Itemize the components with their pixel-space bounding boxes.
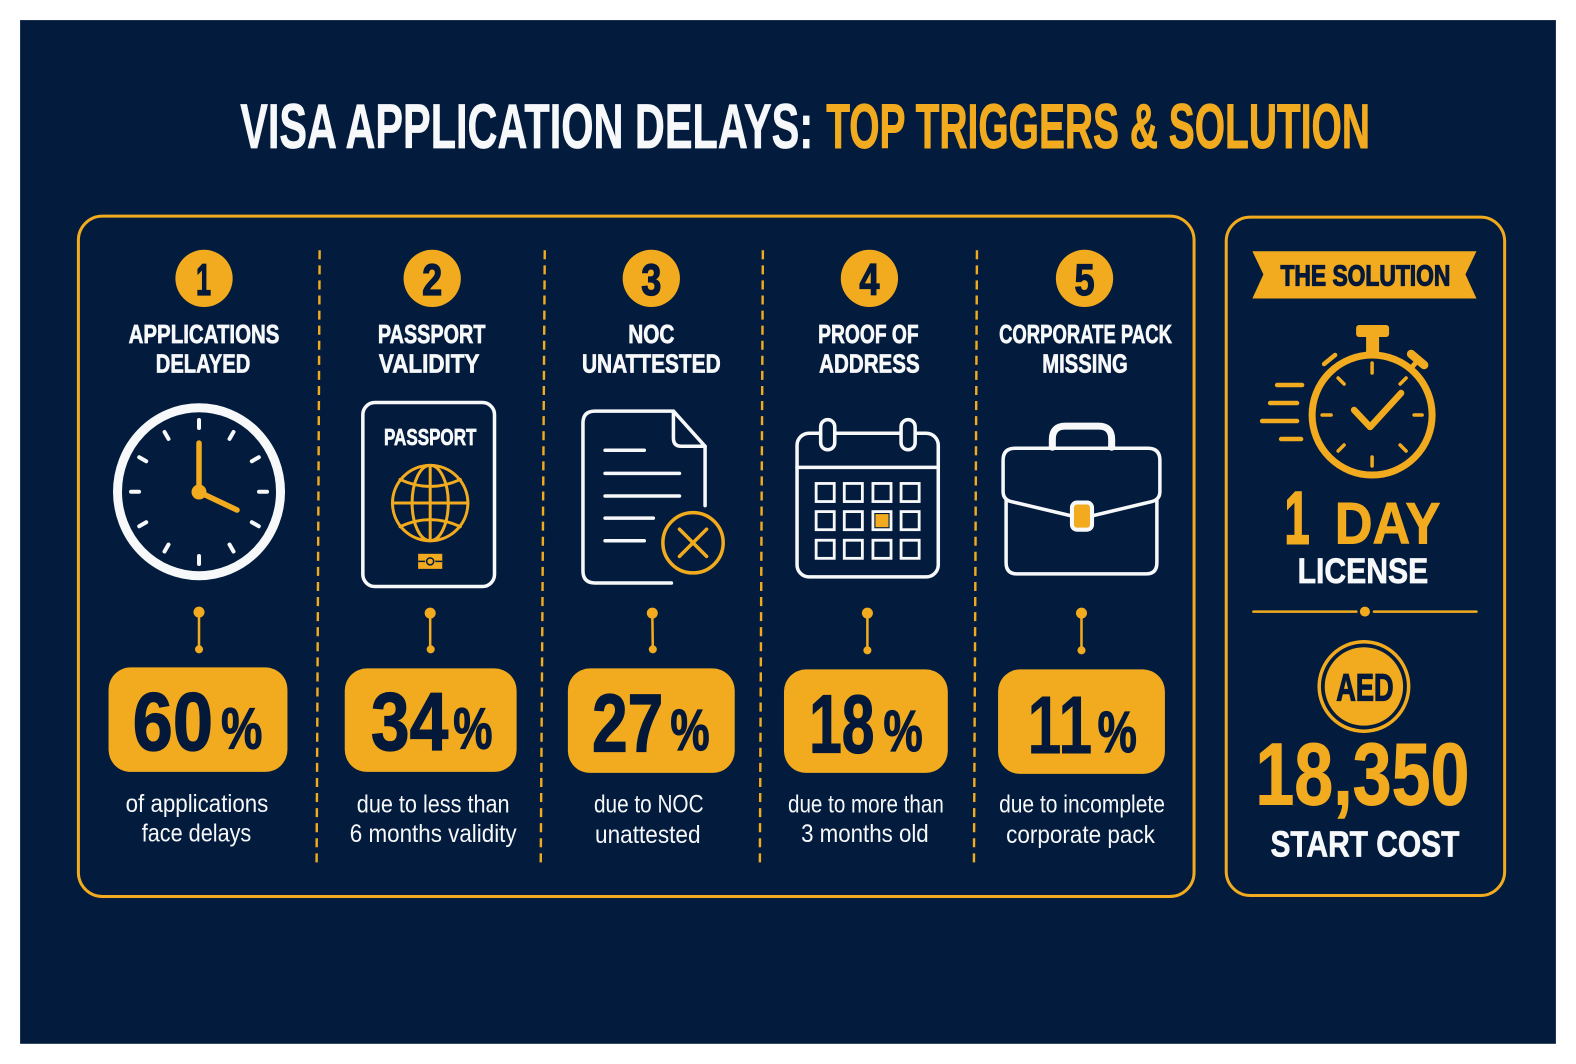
number badge 4 [841,250,898,307]
stat: 11% [998,669,1165,774]
label: license: LICENSE [1298,552,1428,591]
icon: calendar [797,420,938,577]
caption 1: face delays [142,819,251,847]
heading: corporate pack missing [999,319,1172,378]
stat: 11%: 11 [1027,679,1093,771]
stat: 18%: % [883,699,923,764]
number badge 5 [1056,250,1113,307]
stat: 34% [345,668,517,772]
headline: 1 day: DAY [1335,492,1440,557]
caption 5: corporate pack [1006,821,1155,849]
caption 2 [350,791,517,848]
label: start cost: START COST [1270,823,1459,864]
number badge 1: 1 [196,256,211,305]
icon: briefcase [1003,426,1160,574]
heading: corporate pack missing: CORPORATE PACK [999,319,1172,349]
heading: applications delayed: APPLICATIONS [129,319,279,349]
divider dot [1253,607,1476,617]
caption 4: due to more than [788,791,944,819]
heading: passport validity: VALIDITY [379,348,479,378]
number badge 3 [623,250,680,307]
caption 4: 3 months old [801,820,929,848]
heading: applications delayed [129,319,279,378]
heading: corporate pack missing: MISSING [1042,348,1128,378]
heading: NOC unattested: UNATTESTED [582,348,721,378]
number badge 2 [404,250,461,307]
number badge 3: 3 [641,256,661,305]
heading: proof of address: PROOF OF [818,319,919,349]
headline: 1 day: 1 [1285,477,1310,560]
caption 5 [999,791,1165,849]
panel: the solution [1226,217,1505,896]
caption 4 [788,791,944,848]
panel: top triggers [78,216,1194,897]
stat: 60%: 60 [133,676,213,768]
number badge 5: 5 [1074,256,1095,305]
heading: passport validity: PASSPORT [378,319,485,349]
heading: proof of address [818,319,920,378]
connector 1 [193,607,205,653]
caption 2: due to less than [357,791,510,819]
heading: passport validity [378,319,485,378]
heading: NOC unattested: NOC [628,319,675,349]
connector 5 [1076,608,1087,654]
caption 3 [594,791,704,849]
heading: NOC unattested [582,319,721,378]
price: 18,350: 18,350 [1255,725,1469,824]
number badge 4: 4 [859,256,880,305]
icon: clock [118,408,281,576]
trigger 1: applications delayed [109,250,287,847]
ribbon: the solution [1252,251,1476,299]
stat: 18%: 18 [809,678,874,770]
stat: 27%: 27 [592,677,663,769]
number badge 1 [175,250,233,307]
caption 3: unattested [595,821,701,849]
caption 1: of applications [126,790,268,818]
stat: 34%: 34 [371,676,448,768]
icon: document with cross [583,411,723,583]
icon: stopwatch [1262,325,1432,475]
ribbon: the solution: THE SOLUTION [1280,260,1450,292]
icon: passport [363,403,495,586]
stat: 60% [109,667,287,772]
number badge 2: 2 [422,256,442,305]
connector 2 [425,608,436,653]
icon: AED coin [1319,642,1409,731]
trigger 3: NOC unattested [568,250,735,849]
caption 5: due to incomplete [999,791,1165,819]
caption 1 [126,790,268,847]
stat: 34%: % [453,696,492,761]
stat: 18% [784,669,948,773]
stat: 27%: % [670,698,710,763]
connector 4 [862,608,873,654]
stat: 27% [568,668,735,773]
trigger 5: corporate pack missing [998,250,1172,849]
caption 3: due to NOC [594,791,704,819]
connector 3 [647,608,658,653]
stat: 11%: % [1098,700,1137,765]
trigger 4: proof of address [784,250,948,848]
trigger 2: passport validity [345,250,517,848]
title: VISA APPLICATION DELAYS: [240,92,813,162]
icon: passport: PASSPORT [384,424,476,450]
stat: 60%: % [221,696,262,761]
caption 2: 6 months validity [350,820,517,848]
heading: applications delayed: DELAYED [156,348,250,378]
headline: 1 day [1285,477,1440,560]
icon: AED coin: AED [1336,667,1394,710]
heading: proof of address: ADDRESS [819,348,920,378]
